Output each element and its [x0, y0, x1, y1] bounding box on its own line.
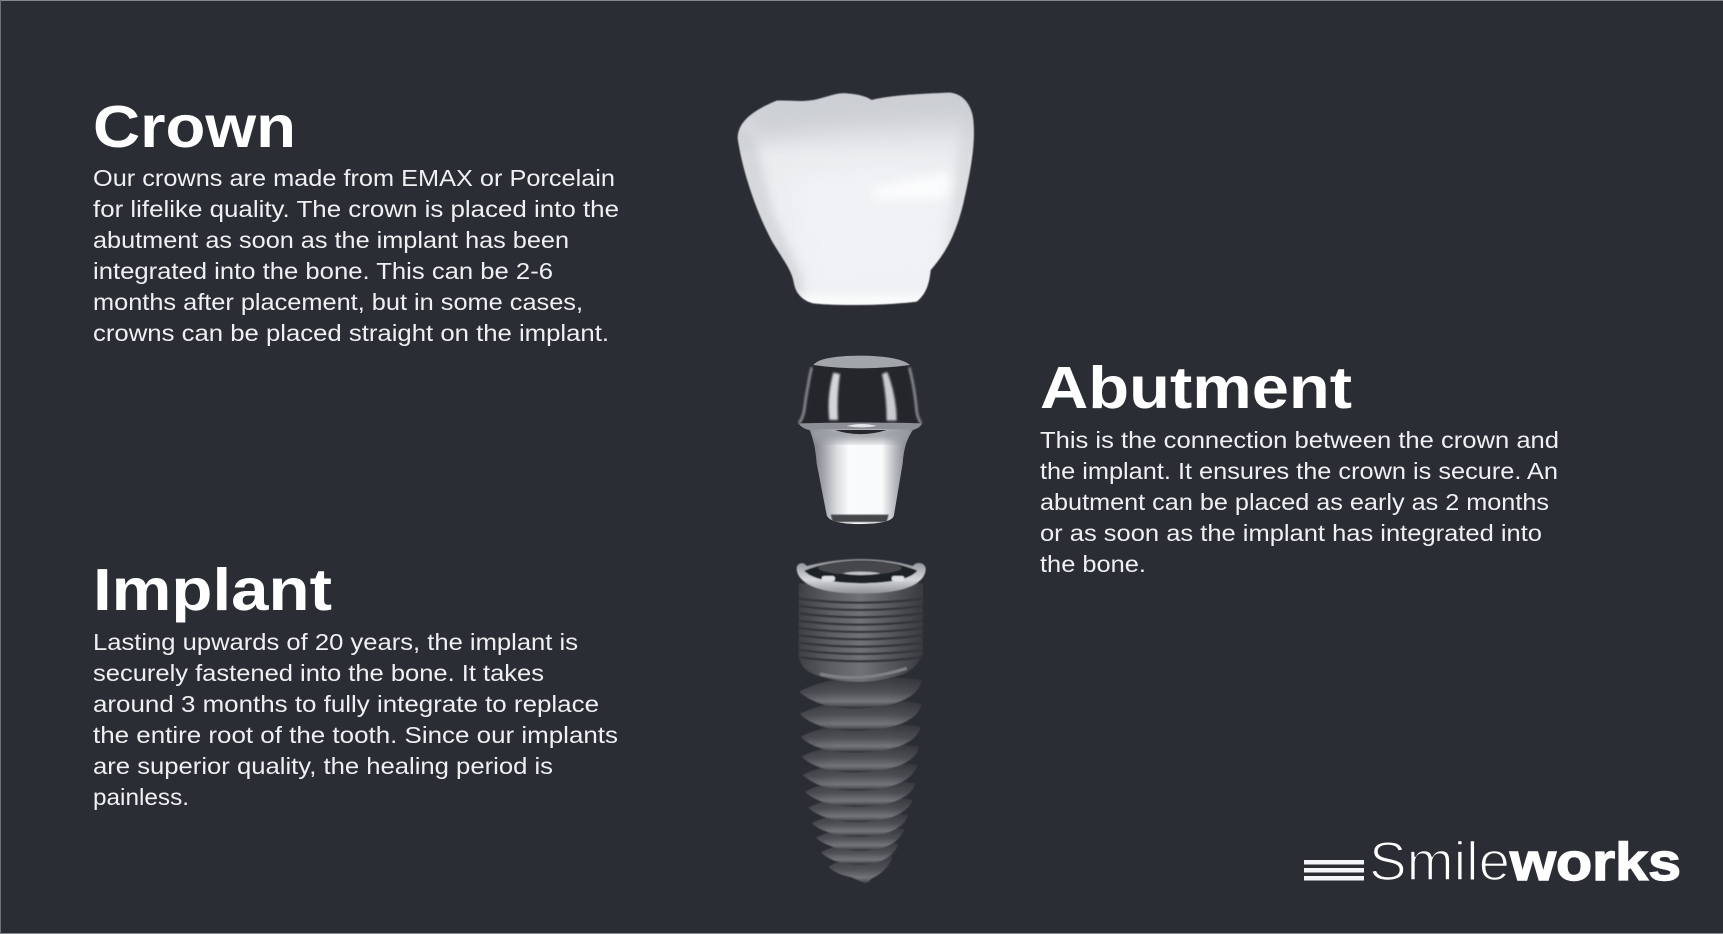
heading: Crown: Crown [93, 94, 296, 160]
coarse threads [799, 677, 922, 884]
heading: Implant: Implant [93, 557, 332, 623]
abutment description: or as soon as the implant has integrated into [1040, 520, 1542, 546]
implant top ring [797, 559, 926, 593]
illustration: abutment [798, 356, 923, 524]
heading: Abutment: Abutment [1040, 355, 1352, 421]
crown description: crowns can be placed straight on the implant. [93, 320, 609, 346]
implant description: are superior quality, the healing period is [93, 753, 553, 779]
abutment description: This is the connection between the crown and [1040, 427, 1559, 453]
crown description: for lifelike quality. The crown is placed into the [93, 196, 619, 222]
logo: Smileworks [1304, 830, 1681, 892]
illustration: crown [730, 87, 980, 310]
thread edge shading [802, 692, 908, 796]
crown description: months after placement, but in some cases, [93, 289, 583, 315]
crown description: Our crowns are made from EMAX or Porcelain [93, 165, 615, 191]
illustration: implant [793, 559, 930, 890]
logo wordmark light: Smile [1369, 830, 1510, 892]
text block: abutment [1040, 355, 1559, 577]
abutment description: the implant. It ensures the crown is secure. An [1040, 458, 1558, 484]
abutment description: the bone. [1040, 551, 1146, 577]
crown description [93, 165, 619, 346]
implant description [93, 629, 618, 810]
crown description: integrated into the bone. This can be 2-6 [93, 258, 553, 284]
implant tapered core [813, 673, 913, 883]
implant description: painless. [93, 784, 189, 810]
abutment flange [799, 422, 922, 431]
implant description: around 3 months to fully integrate to replace [93, 691, 599, 717]
text block: implant [93, 557, 618, 810]
implant description: Lasting upwards of 20 years, the implant is [93, 629, 578, 655]
logo wordmark bold: works [1509, 833, 1681, 892]
crown description: abutment as soon as the implant has been [93, 227, 569, 253]
implant description: securely fastened into the bone. It takes [93, 660, 544, 686]
micro threads neck [799, 583, 923, 682]
abutment description: abutment can be placed as early as 2 months [1040, 489, 1549, 515]
abutment upper dome [798, 356, 923, 428]
abutment description [1040, 427, 1559, 577]
logo bars [1304, 860, 1364, 880]
implant description: the entire root of the tooth. Since our implants [93, 722, 618, 748]
text block: crown [93, 94, 619, 346]
abutment lower stem [809, 429, 913, 524]
